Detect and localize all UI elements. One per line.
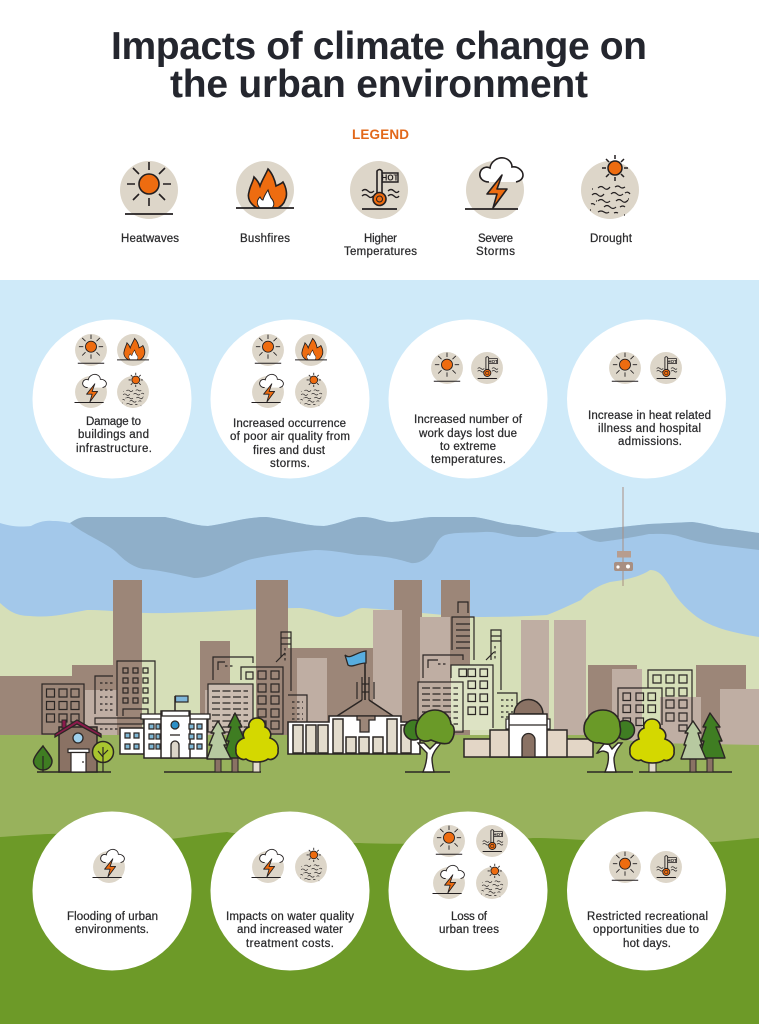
panel: restricted recreation: opportunities due to: [593, 924, 699, 936]
panel: restricted recreation: Restricted recreational: [587, 911, 708, 923]
outline buildings centre-right: [418, 602, 517, 732]
panel: work days lost: work days lost due: [418, 428, 517, 440]
panel: work days lost: temperatures.: [431, 454, 506, 466]
panel: damage to buildings: buildings and: [78, 429, 149, 441]
title: [111, 25, 647, 106]
panel: damage to buildings: [32, 320, 192, 478]
panel: water quality: treatment costs.: [246, 938, 334, 950]
parliament house: [288, 651, 420, 754]
panel: flooding: Flooding of urban: [67, 911, 158, 923]
legend: drought: [581, 155, 639, 245]
communications tower: [614, 487, 633, 586]
dark green foreground: [0, 832, 759, 1024]
panel: loss of urban trees: Loss of: [451, 911, 488, 923]
sky: [0, 280, 759, 580]
small trees by house: [34, 742, 114, 772]
panel: poor air quality: storms.: [270, 458, 310, 470]
panel: heat related illness: admissions.: [618, 436, 682, 448]
outline buildings right: [618, 670, 692, 740]
legend: higher temperatures: [344, 161, 417, 258]
panel: heat related illness: [567, 320, 726, 478]
green hill: [0, 570, 759, 760]
panel: water quality: and increased water: [237, 924, 343, 936]
legend: [120, 127, 639, 258]
panel: heat related illness: illness and hospital: [598, 423, 701, 435]
panel: work days lost: to extreme: [440, 441, 496, 453]
panel: loss of urban trees: [388, 812, 548, 970]
panel: poor air quality: Increased occurrence: [233, 418, 346, 430]
legend: severe storms: Storms: [476, 246, 515, 258]
legend: higher temperatures: Temperatures: [344, 246, 417, 258]
panel: damage to buildings: Damage to: [86, 416, 141, 428]
lawn: [0, 735, 759, 860]
panel: poor air quality: of poor air quality from: [230, 431, 350, 443]
background city blocks: [0, 580, 759, 746]
panel: restricted recreation: hot days.: [623, 938, 671, 950]
landscape: mountains and hills: [0, 517, 759, 760]
panel: flooding: [32, 812, 192, 970]
panel: heat related illness: Increase in heat related: [588, 410, 711, 422]
title: Impacts of climate change on: [111, 25, 647, 68]
panel: water quality: [210, 812, 370, 970]
tree group left: [164, 713, 278, 772]
legend: bushfires: Bushfires: [240, 233, 290, 245]
legend: severe storms: [465, 158, 524, 258]
panel: damage to buildings: infrastructure.: [76, 443, 152, 455]
house: [37, 720, 111, 772]
mid blue range: [0, 517, 759, 740]
far dark range: [70, 517, 557, 578]
panel: restricted recreation: [567, 812, 726, 970]
large tree centre: [404, 710, 454, 772]
large tree right: [584, 710, 634, 772]
panel: poor air quality: [210, 320, 370, 478]
panel: poor air quality: fires and dust: [253, 445, 326, 457]
panel: flooding: environments.: [75, 924, 149, 936]
outline buildings left: [42, 632, 307, 737]
tree group right: [630, 713, 732, 772]
panel: work days lost: Increased number of: [414, 414, 523, 426]
panel: loss of urban trees: urban trees: [439, 924, 499, 936]
title: the urban environment: [170, 63, 588, 106]
panel: work days lost: [388, 320, 548, 478]
legend: drought: Drought: [590, 233, 633, 245]
panel: water quality: Impacts on water quality: [226, 911, 354, 923]
legend: heatwaves: [120, 161, 179, 245]
legend: severe storms: Severe: [478, 233, 513, 245]
school building: [120, 696, 210, 758]
legend: higher temperatures: Higher: [364, 233, 397, 245]
legend heading: LEGEND: [352, 127, 409, 142]
far dark range right: [576, 522, 759, 550]
war memorial: [464, 700, 593, 757]
legend: heatwaves: Heatwaves: [121, 233, 179, 245]
legend: bushfires: [236, 161, 294, 245]
